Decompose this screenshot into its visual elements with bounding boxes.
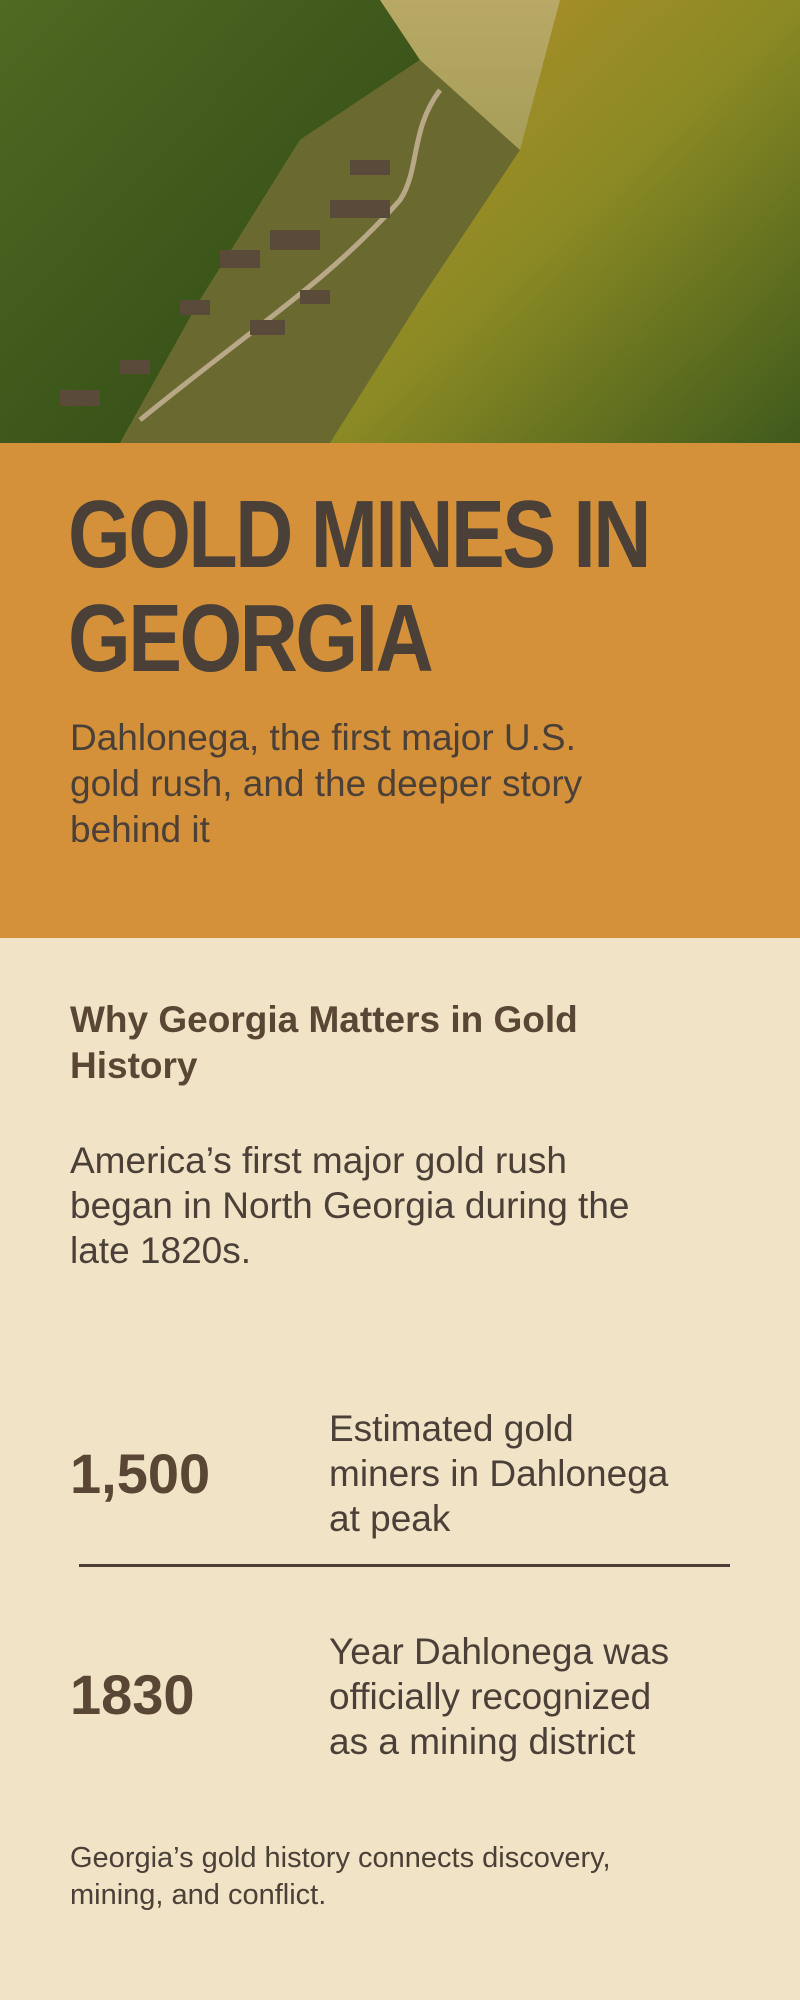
header panel xyxy=(0,443,800,938)
subtitle: behind it xyxy=(70,809,210,850)
subtitle: Dahlonega, the first major U.S. xyxy=(70,717,576,758)
stat description xyxy=(329,1408,668,1539)
intro paragraph: America’s first major gold rush xyxy=(70,1140,567,1181)
stat: miners xyxy=(70,1408,668,1539)
stat number: 1,500 xyxy=(70,1442,210,1505)
section heading: History xyxy=(70,1045,197,1086)
footer note: mining, and conflict. xyxy=(70,1879,326,1911)
stat description: miners in Dahlonega xyxy=(329,1453,668,1494)
hero photo: valley with mining town xyxy=(0,0,800,443)
subtitle xyxy=(70,717,582,850)
stat description: Estimated gold xyxy=(329,1408,574,1449)
section heading xyxy=(70,999,578,1086)
stat description xyxy=(329,1631,669,1762)
stat description: at peak xyxy=(329,1498,450,1539)
section heading: Why Georgia Matters in Gold xyxy=(70,999,578,1040)
subtitle: gold rush, and the deeper story xyxy=(70,763,582,804)
intro paragraph xyxy=(70,1140,629,1271)
stat description: Year Dahlonega was xyxy=(329,1631,669,1672)
footer note xyxy=(70,1842,611,1911)
title xyxy=(68,481,649,692)
title: GEORGIA xyxy=(68,585,431,692)
stat: year xyxy=(70,1631,669,1762)
title: GOLD MINES IN xyxy=(68,481,649,588)
intro paragraph: began in North Georgia during the xyxy=(70,1185,629,1226)
stat description: as a mining district xyxy=(329,1721,635,1762)
stat description: officially recognized xyxy=(329,1676,651,1717)
intro paragraph: late 1820s. xyxy=(70,1230,251,1271)
stat number: 1830 xyxy=(70,1663,195,1726)
footer note: Georgia’s gold history connects discovery, xyxy=(70,1842,611,1874)
